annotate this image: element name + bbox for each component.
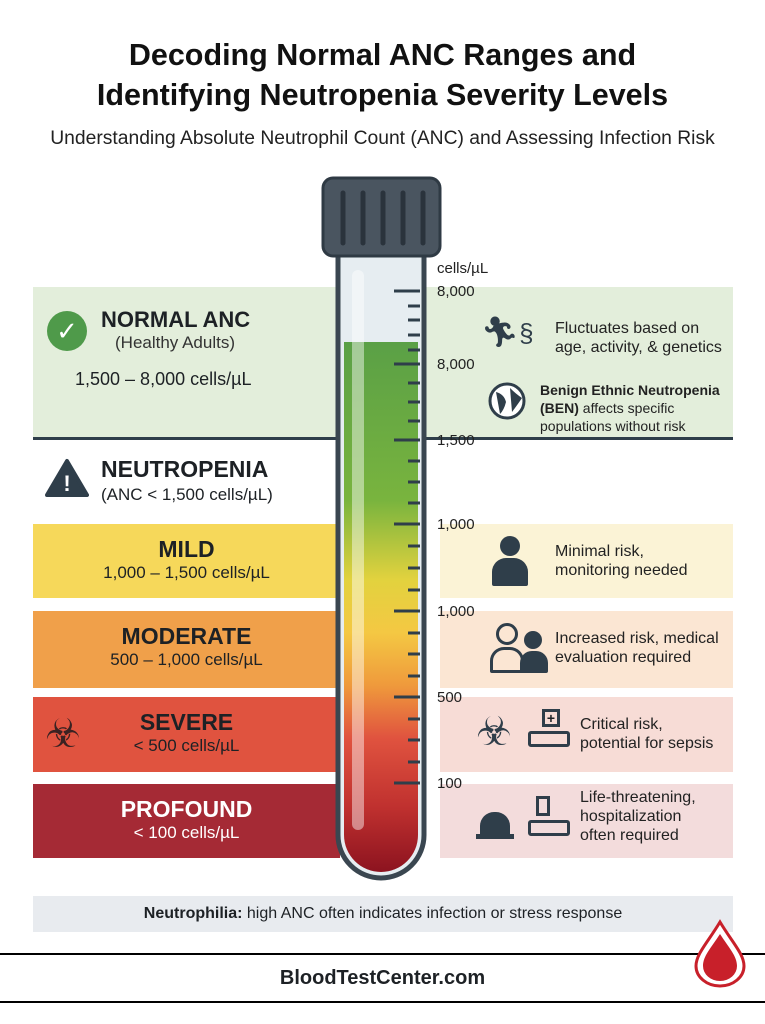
band: profound (33, 784, 340, 858)
right: mild (440, 524, 733, 598)
band: profound: PROFOUND (121, 796, 252, 822)
band: moderate: 500 – 1,000 cells/µL (110, 650, 263, 669)
neutrophilia note: Neutrophilia: high ANC often indicates infection or stress response (144, 905, 622, 922)
band: profound: < 100 cells/µL (134, 823, 239, 842)
text: 1,000 (437, 516, 475, 533)
right: moderate (440, 611, 733, 688)
right: profound: hospitalization (580, 808, 681, 825)
text: 1,500 (437, 432, 475, 449)
panel: normal (33, 287, 733, 440)
right: moderate: Increased risk, medical (555, 630, 719, 647)
text: 100 (437, 775, 462, 792)
icon: check: ✓ (56, 316, 78, 346)
heading: normal ANC: NORMAL ANC (101, 307, 250, 332)
right: severe: potential for sepsis (580, 735, 713, 752)
band: mild: 1,000 – 1,500 cells/µL (103, 563, 270, 582)
right: profound (440, 784, 733, 858)
panel: normal: 1,500 – 8,000 cells/µL (75, 369, 252, 389)
band: severe: SEVERE (140, 709, 233, 735)
band: severe (33, 697, 340, 772)
scale labels: cells/µL (437, 260, 488, 277)
icon: warning: ! (63, 471, 71, 496)
right: mild: monitoring needed (555, 562, 688, 579)
neutrophilia note (33, 896, 733, 932)
footer (0, 953, 765, 1003)
right: severe: Critical risk, (580, 716, 663, 733)
text: 8,000 (437, 283, 475, 300)
right: severe (440, 697, 733, 772)
note: fluctuates: age, activity, & genetics (555, 339, 722, 356)
text: 1,000 (437, 603, 475, 620)
right: profound: Life-threatening, (580, 789, 696, 806)
neutropenia heading: NEUTROPENIA (101, 456, 268, 482)
subtitle: Understanding Absolute Neutrophil Count (ANC) and Assessing Infection Risk (50, 128, 715, 149)
right: moderate: evaluation required (555, 649, 691, 666)
neutropenia heading (45, 456, 273, 504)
right: severe: ☣ (476, 710, 512, 754)
right: severe: + (547, 710, 555, 726)
icon: check (47, 311, 87, 351)
note: BEN: populations without risk (540, 418, 686, 434)
title: Identifying Neutropenia Severity Levels (97, 78, 668, 112)
note: BEN: Benign Ethnic Neutropenia (BEN) affects specific (540, 382, 720, 416)
icon: blood drop (694, 919, 746, 988)
note: BEN (540, 382, 720, 434)
text: 500 (437, 689, 462, 706)
title (97, 38, 668, 112)
right: profound: often required (580, 827, 679, 844)
icon: globe (488, 382, 526, 420)
neutropenia heading: (ANC < 1,500 cells/µL) (101, 485, 273, 504)
band: mild: MILD (158, 536, 215, 562)
icon: runner dna: 🏃︎§ (481, 316, 534, 349)
band: severe: < 500 cells/µL (134, 736, 239, 755)
icon: warning (45, 458, 89, 497)
note: fluctuates (555, 320, 722, 356)
band: moderate (33, 611, 340, 688)
footer: BloodTestCenter.com (280, 967, 485, 989)
band: moderate: MODERATE (122, 623, 251, 649)
note: fluctuates: Fluctuates based on (555, 320, 699, 337)
icon: biohazard: ☣ (45, 712, 81, 756)
right: mild: Minimal risk, (555, 543, 644, 560)
text: 8,000 (437, 356, 475, 373)
title: Decoding Normal ANC Ranges and (129, 38, 636, 72)
panel: normal: (Healthy Adults) (115, 333, 235, 352)
band: mild (33, 524, 340, 598)
